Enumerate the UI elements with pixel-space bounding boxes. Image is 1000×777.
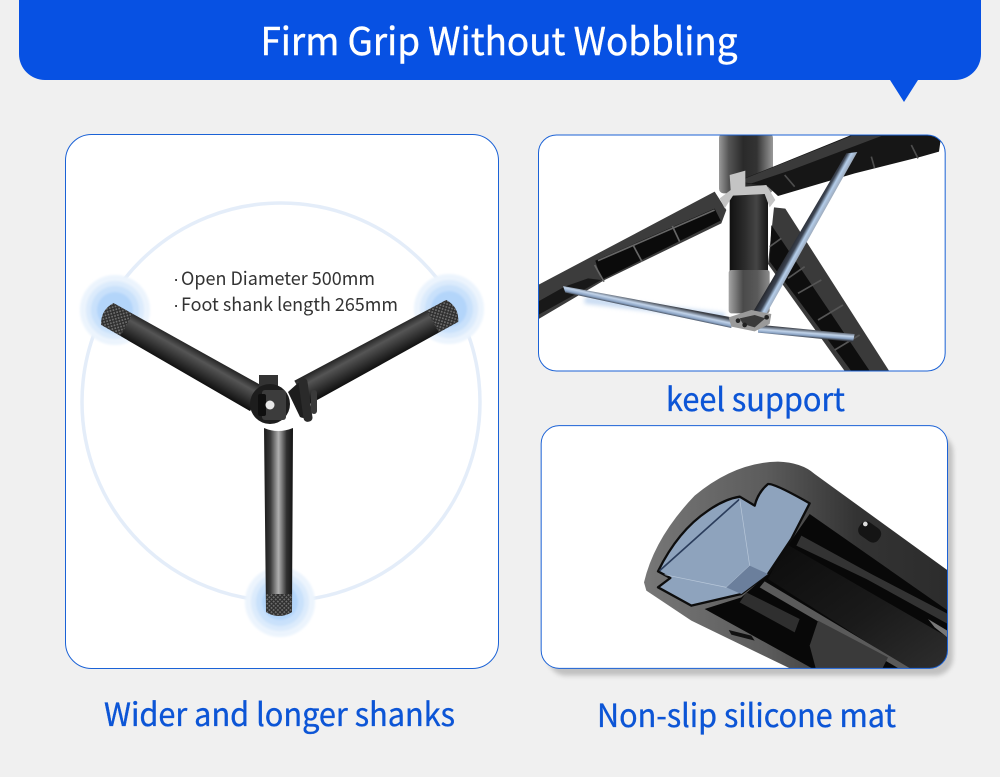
- banner: [19, 0, 981, 102]
- foot cross-section illustration: [644, 462, 948, 671]
- panel: silicone mat: [541, 426, 953, 676]
- keel mechanism illustration: [538, 133, 941, 373]
- leg: bottom: [264, 428, 293, 616]
- spec text: Foot shank length 265mm: [181, 291, 398, 317]
- leg: right: [294, 297, 462, 405]
- diameter circle: [82, 203, 480, 601]
- leg: left: [97, 300, 264, 411]
- joint hub: [250, 375, 317, 424]
- panel: wider and longer shanks: [66, 134, 498, 668]
- contact glow: bottom: [245, 567, 315, 637]
- spec text: [173, 265, 398, 317]
- spec text: ·: [173, 294, 179, 315]
- contact glow: right: [414, 274, 484, 344]
- spec text: Open Diameter 500mm: [181, 265, 375, 291]
- spec text: ·: [173, 268, 179, 289]
- caption: keel support: keel support: [666, 375, 845, 421]
- caption: wider and longer shanks: Wider and longer shanks: [104, 690, 455, 736]
- caption: silicone mat: Non-slip silicone mat: [597, 691, 896, 737]
- title: Firm Grip Without Wobbling: [260, 11, 738, 66]
- panel: keel support: [538, 133, 945, 373]
- contact glow: left: [80, 275, 150, 345]
